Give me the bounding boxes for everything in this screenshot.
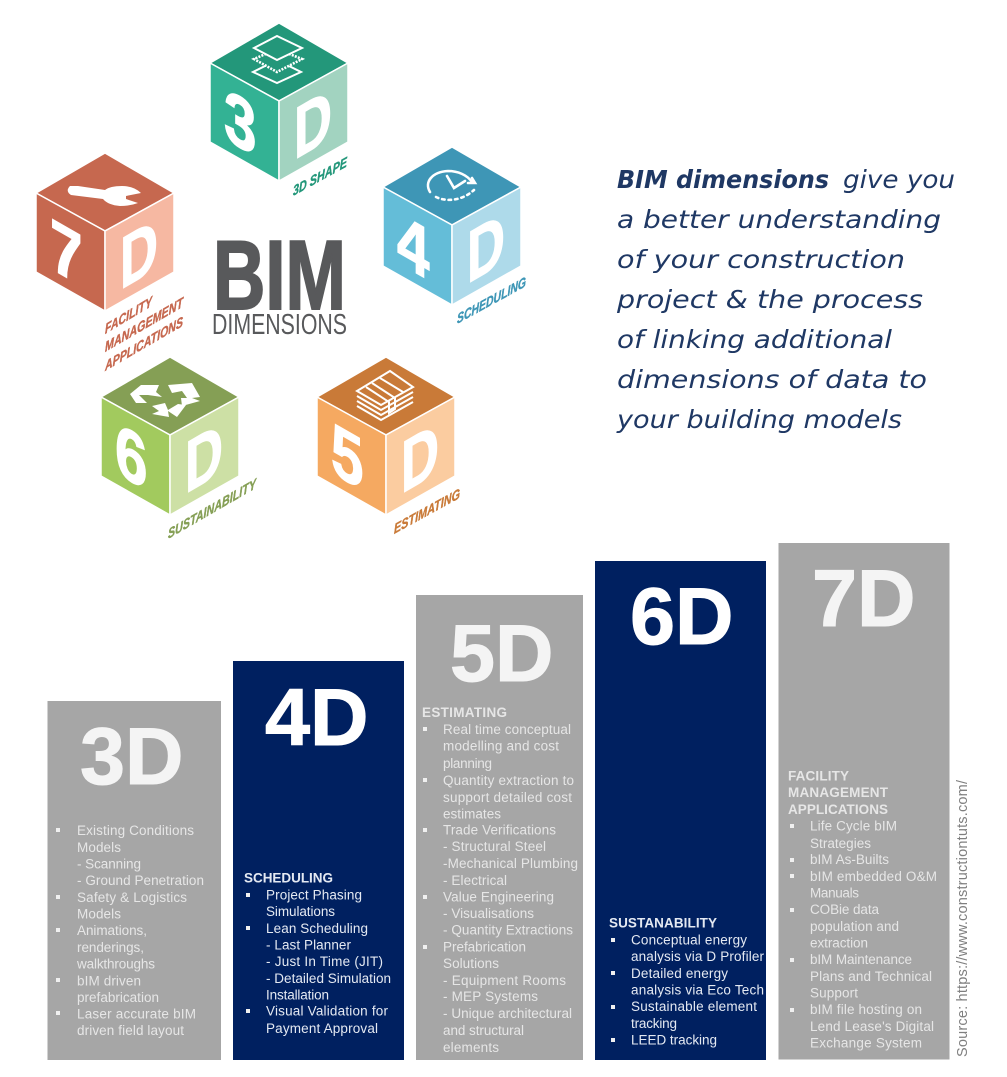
cube: 4D scheduling: 4 (397, 195, 429, 296)
panel: 5D: 5D (450, 609, 554, 699)
panel: 3D: walkthroughs (76, 956, 155, 972)
panel: 4D: - Last Planner (266, 938, 352, 952)
panel: 3D: prefabrication (77, 990, 159, 1005)
cube: 7D facility management: MANAGEMENT (105, 294, 184, 356)
cube: 5D estimating (317, 357, 460, 538)
panel: 6D: LEED tracking (631, 1032, 717, 1048)
cube: 3D shape: D (294, 73, 332, 176)
panel: 6D (595, 561, 766, 1060)
cube: 3D shape (210, 23, 348, 200)
panel: 3D: Existing Conditions (77, 823, 194, 838)
intro text block: of linking additional (617, 325, 892, 354)
panel: 7D: Exchange System (810, 1036, 922, 1050)
panel: 7D: Support (810, 986, 858, 1000)
panel: 5D: and structural (443, 1023, 524, 1038)
panel: 4D: Payment Approval (266, 1021, 378, 1036)
panel: 4D: SCHEDULING (244, 870, 333, 886)
panel: 7D: bIM As-Builts (810, 852, 889, 867)
cube: 6D sustainability (101, 357, 257, 543)
panel: 7D: Strategies (810, 836, 871, 851)
logo: BIM dimensions: DIMENSIONS (212, 309, 347, 341)
panel: 4D: Simulations (266, 904, 335, 919)
panel: 7D: bIM embedded O&M (810, 869, 937, 884)
cube: 7D facility management: APPLICATIONS (104, 314, 183, 375)
panel: 3D: Models (77, 906, 121, 922)
cube: 7D facility management: FACILITY (105, 293, 153, 338)
panel: 5D: estimates (443, 806, 501, 822)
panel: 3D (48, 701, 221, 1060)
panel: 5D: - Quantity Extractions (443, 922, 573, 938)
cube: 4D scheduling: D (467, 197, 505, 300)
panel: 5D: - Visualisations (443, 906, 534, 921)
panel: 6D: 6D (630, 572, 734, 662)
panel: 5D: elements (443, 1040, 499, 1055)
intro text block: your building models (616, 405, 902, 434)
panel: 3D: 3D (80, 712, 184, 802)
panel: 6D: Detailed energy (631, 966, 728, 981)
panel: 5D: - Unique architectural (443, 1006, 572, 1021)
cube: 5D estimating: 5 (331, 405, 363, 506)
panel: 5D: ESTIMATING (422, 705, 507, 720)
panel: 7D: MANAGEMENT (788, 785, 889, 800)
panel: 7D: extraction (810, 936, 868, 950)
panel: 6D: analysis via D Profiler (631, 949, 764, 964)
panel: 5D: Prefabrication (443, 940, 526, 954)
panel: 3D: - Scanning (77, 856, 141, 872)
panel: 7D: bIM file hosting on (810, 1002, 922, 1017)
panel: 5D: - Equipment Rooms (443, 973, 566, 988)
cube: 3D shape: 3D SHAPE (293, 154, 348, 200)
panel: 4D: - Just In Time (JIT) (266, 954, 383, 969)
panel: 3D: Animations, (77, 923, 147, 938)
panel: 7D: COBie data (810, 902, 879, 917)
panel: 7D: Life Cycle bIM (810, 818, 897, 834)
cube: 3D shape: 3 (224, 71, 256, 172)
cube: 7D facility management: D (120, 203, 158, 306)
intro text block: dimensions of data to (617, 365, 927, 394)
cube: 6D sustainability: SUSTAINABILITY (168, 475, 257, 543)
panel: 3D: Safety & Logistics (77, 890, 187, 905)
panel: 6D: tracking (631, 1016, 677, 1031)
cube: 7D facility management: 7 (50, 201, 82, 302)
panel: 4D (233, 661, 404, 1060)
panel: 4D: Installation (266, 988, 329, 1002)
intro text block: project & the process (616, 285, 923, 314)
panel: 6D: SUSTANABILITY (609, 916, 717, 930)
cube: 6D sustainability: 6 (115, 405, 147, 506)
panel: 6D: analysis via Eco Tech (631, 982, 764, 998)
panel: 4D: - Detailed Simulation (266, 971, 391, 986)
panel: 5D (416, 595, 583, 1060)
panel: 7D: FACILITY (788, 768, 849, 784)
panel: 5D: - Electrical (443, 873, 507, 888)
panel: 5D: -Mechanical Plumbing (443, 856, 578, 871)
cube: 5D estimating: ESTIMATING (394, 485, 460, 538)
panel: 5D: support detailed cost (443, 790, 572, 805)
panel: 5D: Value Engineering (443, 890, 554, 904)
intro text block: BIM dimensions (617, 165, 829, 194)
panel: 5D: modelling and cost (443, 738, 559, 754)
panel: 5D: Solutions (443, 956, 499, 971)
panel: 3D: Laser accurate bIM (77, 1006, 196, 1022)
cube: 4D scheduling: SCHEDULING (457, 274, 526, 328)
cube: 7D facility management (36, 153, 184, 375)
panel: 5D: Trade Verifications (443, 822, 556, 838)
cube: 5D estimating: D (401, 407, 439, 510)
panel: 6D: Conceptual energy (631, 932, 747, 948)
cube: 6D sustainability: D (185, 407, 223, 510)
intro text block (616, 165, 955, 434)
intro text block: give you (843, 165, 955, 194)
panel: 5D: planning (443, 756, 492, 771)
cube: 4D scheduling (383, 147, 526, 328)
intro text block: of your construction (617, 245, 905, 274)
panel: 7D: APPLICATIONS (788, 802, 888, 817)
panel: 7D: Plans and Technical (810, 969, 932, 984)
panel: 4D: 4D (265, 673, 369, 763)
intro text block: a better understanding (617, 205, 941, 234)
panel: 7D (778, 543, 950, 1060)
source credit: Source: https://www.constructiontuts.com/ (955, 779, 971, 1057)
panel: 3D: Models (77, 840, 121, 855)
panel: 4D: Visual Validation for (266, 1004, 388, 1018)
panel: 7D: population and (810, 919, 899, 934)
logo: BIM dimensions: BIM (213, 220, 346, 330)
panel: 7D: Manuals (810, 886, 859, 900)
panel: 5D: Quantity extraction to (443, 773, 574, 788)
panel: 3D: renderings, (77, 940, 144, 955)
panel: 3D: driven field layout (77, 1023, 184, 1038)
panel: 5D: - MEP Systems (443, 989, 538, 1004)
panel: 7D: 7D (812, 554, 916, 644)
panel: 3D: bIM driven (77, 974, 141, 988)
panel: 7D: Lend Lease's Digital (810, 1019, 934, 1034)
panel: 4D: Lean Scheduling (266, 921, 368, 936)
panel: 4D: Project Phasing (266, 888, 362, 902)
panel: 7D: bIM Maintenance (810, 952, 912, 967)
logo: BIM dimensions (212, 220, 347, 341)
panel: 3D: - Ground Penetration (77, 873, 204, 888)
panel: 6D: Sustainable element (631, 999, 757, 1014)
panel: 5D: Real time conceptual (443, 722, 571, 737)
panel: 5D: - Structural Steel (443, 839, 546, 854)
